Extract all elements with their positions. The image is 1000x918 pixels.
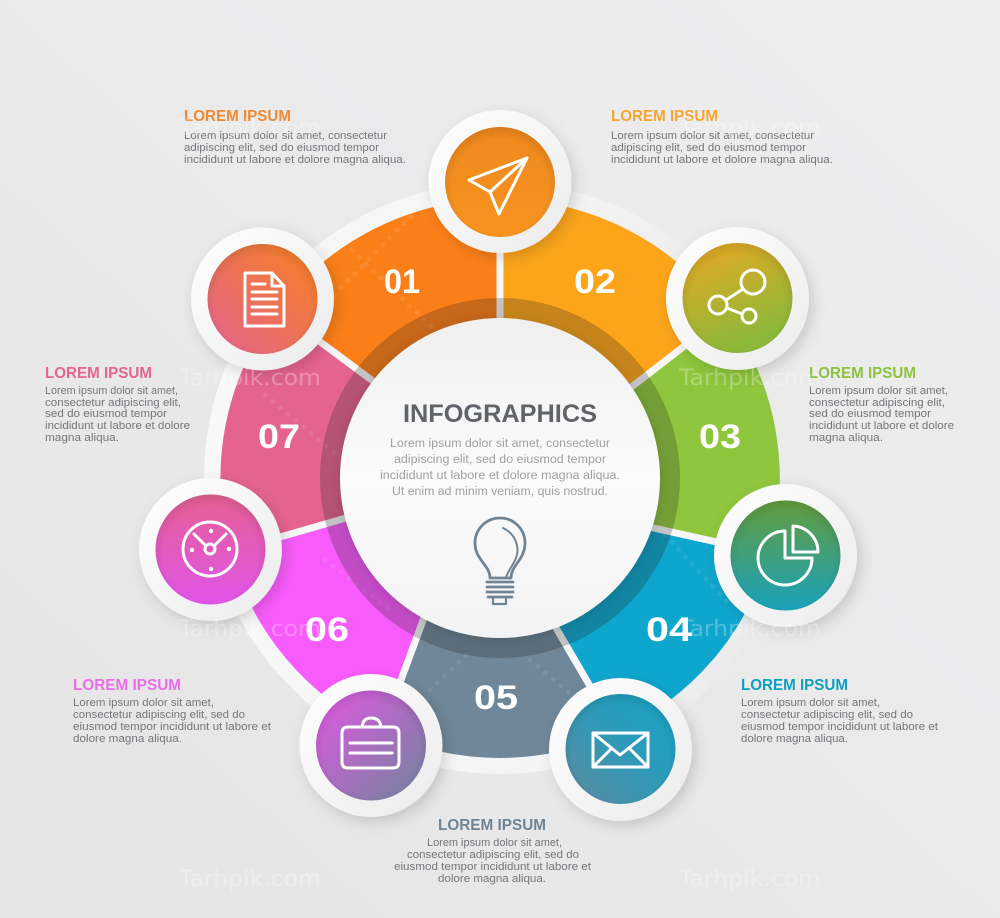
text block 03: incididunt ut labore et dolore — [809, 420, 954, 432]
text block 07: magna aliqua. — [45, 432, 119, 444]
text block 03: LOREM IPSUM — [809, 365, 916, 382]
text block 04 — [741, 677, 938, 745]
icon badge 07: document — [191, 228, 334, 370]
segment 05 slate: 05 — [474, 679, 518, 717]
text block 05 — [394, 817, 591, 885]
watermarks: Tarhpik.com — [678, 366, 821, 391]
watermarks: Tarhpik.com — [178, 366, 321, 391]
watermarks: Tarhpik.com — [178, 116, 321, 141]
text block 02: incididunt ut labore et dolore magna aliqua. — [611, 154, 833, 166]
text block 03: sed do eiusmod tempor — [809, 408, 931, 420]
center text: Lorem ipsum dolor sit amet, consectetur — [390, 438, 610, 450]
segment 06 magenta — [230, 514, 425, 732]
text block 03: Lorem ipsum dolor sit amet, — [809, 385, 948, 397]
text block 01 — [184, 108, 406, 166]
watermarks: Tarhpik.com — [678, 116, 821, 141]
segment 04 blue: 04 — [646, 611, 692, 649]
watermarks: Tarhpik.com — [178, 867, 321, 892]
text block 04: consectetur adipiscing elit, sed do — [741, 709, 913, 721]
segment 01 orange: 01 — [384, 263, 420, 301]
text block 06: Lorem ipsum dolor sit amet, — [73, 697, 214, 709]
text block 06: dolore magna aliqua. — [73, 733, 182, 745]
segment 05 slate — [382, 615, 617, 758]
center title: INFOGRAPHICS — [403, 400, 597, 428]
dark inner ring — [320, 298, 680, 658]
center text — [380, 438, 620, 498]
text block 01: Lorem ipsum dolor sit amet, consectetur — [184, 130, 387, 142]
outer pale ring — [204, 182, 796, 774]
center circle — [340, 318, 660, 638]
segment 02 amber — [500, 199, 726, 392]
text block 01: incididunt ut labore et dolore magna aliqua. — [184, 154, 406, 166]
segment 07 pink — [220, 310, 385, 551]
text block 07: sed do eiusmod tempor — [45, 408, 167, 420]
text block 06 — [73, 677, 271, 745]
text block 05: dolore magna aliqua. — [438, 873, 546, 885]
icon: light bulb — [475, 518, 525, 604]
segment 03 green — [625, 314, 780, 554]
watermarks: Tarhpik.com — [178, 617, 321, 642]
text block 06: eiusmod tempor incididunt ut labore et — [73, 721, 271, 733]
text block 07 — [45, 365, 190, 444]
center text: adipiscing elit, sed do eiusmod tempor — [394, 454, 606, 466]
text block 02: LOREM IPSUM — [611, 108, 718, 125]
text block 01: adipiscing elit, sed do eiusmod tempor — [184, 142, 379, 154]
text block 05: consectetur adipiscing elit, sed do — [407, 849, 579, 861]
text block 02 — [611, 108, 833, 166]
segment 04 blue — [552, 525, 770, 732]
icon badge 04: envelope — [549, 678, 692, 821]
text block 05: LOREM IPSUM — [438, 817, 546, 834]
segment 06 magenta: 06 — [305, 611, 349, 649]
text block 02: Lorem ipsum dolor sit amet, consectetur — [611, 130, 814, 142]
watermarks — [178, 116, 821, 892]
segment 02 amber: 02 — [574, 263, 616, 301]
segment 07 pink: 07 — [258, 418, 300, 456]
text block 06: LOREM IPSUM — [73, 677, 181, 694]
text block 03: consectetur adipiscing elit, — [809, 397, 945, 409]
text block 04: Lorem ipsum dolor sit amet, — [741, 697, 880, 709]
center text: incididunt ut labore et dolore magna aliqua. — [380, 470, 620, 482]
icon badge 03: pie chart — [714, 484, 857, 627]
segment 01 orange — [277, 199, 500, 390]
watermarks: Tarhpik.com — [678, 867, 821, 892]
text block 04: dolore magna aliqua. — [741, 733, 848, 745]
text block 03 — [809, 365, 954, 444]
text block 07: Lorem ipsum dolor sit amet, — [45, 385, 178, 397]
segment 03 green: 03 — [699, 418, 741, 456]
text block 07: incididunt ut labore et dolore — [45, 420, 190, 432]
text block 04: eiusmod tempor incididunt ut labore et — [741, 721, 938, 733]
icon badge 02: share — [666, 227, 809, 370]
text block 03: magna aliqua. — [809, 432, 883, 444]
icon badge 05: briefcase — [300, 674, 442, 817]
text block 01: LOREM IPSUM — [184, 108, 291, 125]
center text: Ut enim ad minim veniam, quis nostrud. — [392, 486, 608, 498]
text block 07: consectetur adipiscing elit, — [45, 397, 181, 409]
text block 02: adipiscing elit, sed do eiusmod tempor — [611, 142, 806, 154]
text block 04: LOREM IPSUM — [741, 677, 848, 694]
text block 06: consectetur adipiscing elit, sed do — [73, 709, 245, 721]
text block 07: LOREM IPSUM — [45, 365, 152, 382]
watermarks: Tarhpik.com — [678, 617, 821, 642]
text block 05: eiusmod tempor incididunt ut labore et — [394, 861, 591, 873]
text block 05: Lorem ipsum dolor sit amet, — [427, 837, 562, 849]
icon badge 06: gauge clock — [139, 478, 282, 621]
icon badge 01: paper plane — [428, 110, 572, 253]
